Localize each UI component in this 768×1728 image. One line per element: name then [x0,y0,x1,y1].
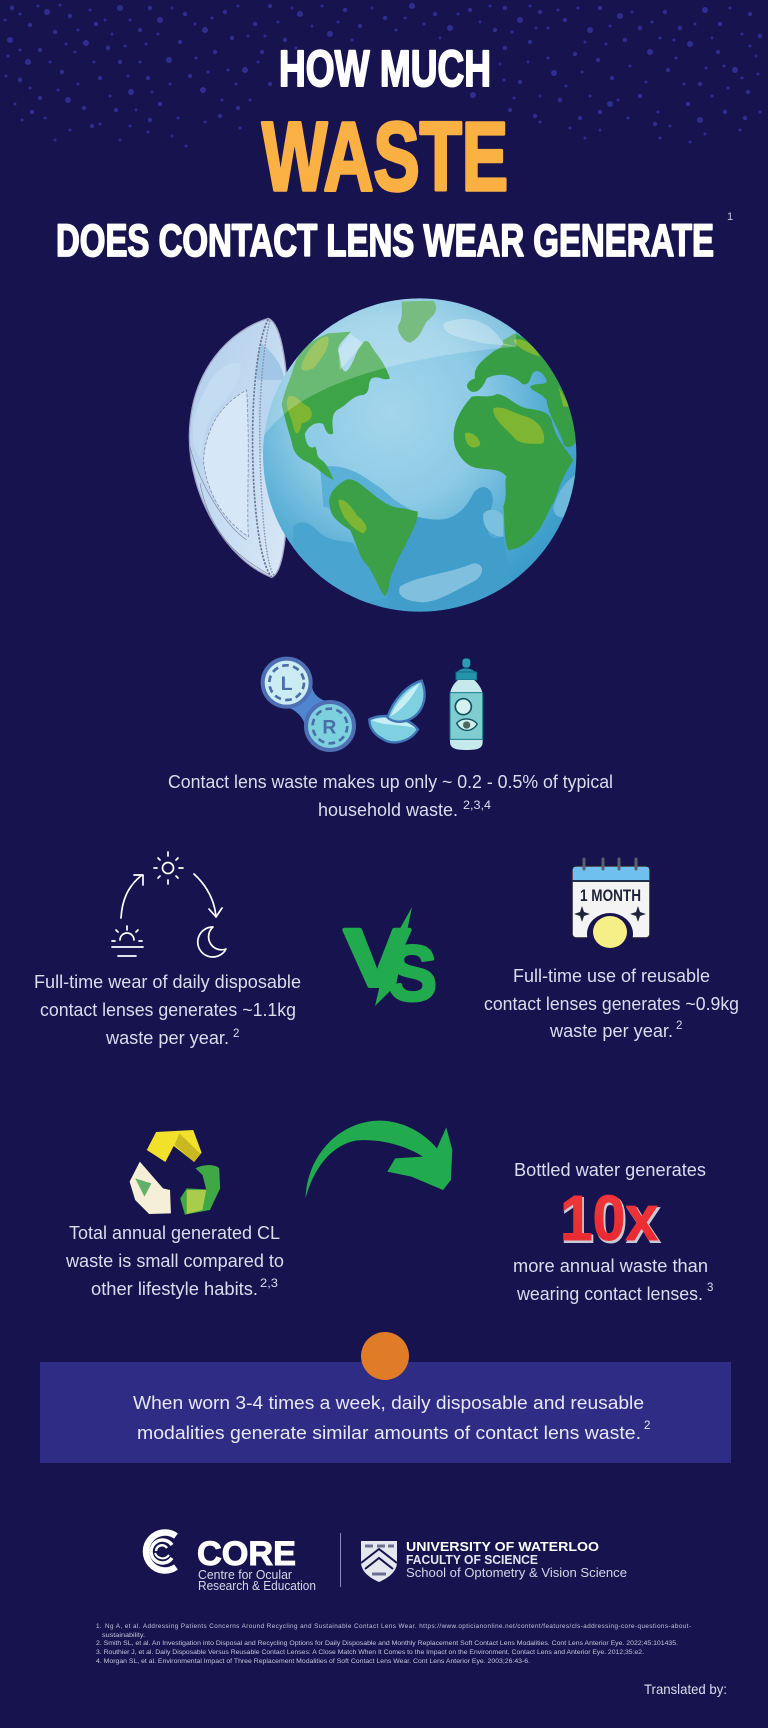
callout: wear frequency: modalities generate similar amounts of contact lens waste. [137,1423,641,1443]
references: Ng A, et al. Addressing Patients Concerns Around Recycling and Sustainable Contact Lens Wear. https://www.opticianonline.net/content/features/cls-addressing-core-questions-about- [105,1623,691,1630]
text: lifestyle habits [65,1223,284,1299]
icon: monthly calendar: 1 MONTH [580,886,641,905]
text: household waste share [168,772,613,820]
references: sustainability. [102,1632,145,1639]
logo: university of waterloo: FACULTY OF SCIENCE [406,1553,538,1567]
arrow: curved green [306,1121,452,1198]
big number: 10x: 10x [561,1184,660,1256]
text: lifestyle habits: 2,3 [260,1278,278,1290]
icon: globe [263,293,580,613]
callout: wear frequency [40,1332,731,1463]
icon: core rings [146,1532,176,1570]
terrain highlights [287,337,570,533]
text: household waste share: Contact lens waste makes up only ~ 0.2 - 0.5% of typical [168,772,613,792]
big number: 10x: 10x [560,1182,658,1254]
logo: core [146,1532,316,1593]
panel: bottled water: wearing contact lenses. [516,1284,703,1304]
panel: daily disposable [34,852,301,1048]
icon: day cycle [112,852,226,957]
logo: university of waterloo [361,1539,627,1582]
references [96,1623,691,1665]
title [56,40,733,266]
icon: lens case: L [281,674,293,695]
logo: university of waterloo: School of Optometry & Vision Science [406,1565,627,1580]
continent: greenland [398,301,436,343]
panel: bottled water: 3 [707,1282,713,1294]
icon: versus badge: S [388,929,437,1017]
continent: africa [454,394,573,550]
references: 4. Morgan SL, et al. Environmental Impact of Three Replacement Modalities of Soft Contact Lens Wear. Cont Lens Anterior Eye. 2003;26:43-6. [96,1658,530,1665]
icon: lens case: R [322,717,336,738]
text: daily disposable waste: waste per year. [105,1028,229,1048]
icon: shield [361,1541,397,1582]
text: daily disposable waste: contact lenses generates ~1.1kg [40,1000,296,1020]
continent: eurasia [467,333,576,447]
callout: wear frequency: When worn 3-4 times a week, daily disposable and reusable [133,1393,644,1413]
illustration: contact lens and globe [189,293,580,613]
text: reusable waste: contact lenses generates ~0.9kg [484,994,739,1014]
text: daily disposable waste [34,972,301,1048]
text: lifestyle habits: Total annual generated CL [69,1223,280,1243]
speckled dots at top [5,5,760,146]
panel: lifestyle comparison [65,1130,284,1299]
icon: lens case [263,659,354,750]
panel: reusable [484,859,739,1041]
text: reusable waste [484,966,739,1041]
text: daily disposable waste: Full-time wear of daily disposable [34,972,301,992]
panel: bottled water: more annual waste than [513,1256,708,1276]
icon: versus badge [344,907,437,1017]
text: household waste share: 2,3,4 [463,800,492,812]
callout: wear frequency: 2 [644,1420,650,1432]
logo: university of waterloo: UNIVERSITY OF WATERLOO [406,1539,599,1554]
logo: core: Centre for Ocular [198,1568,292,1582]
icon: recycling symbol [130,1130,220,1215]
text: reusable waste: Full-time use of reusable [513,966,710,986]
panel: bottled water [513,1160,713,1304]
title reference superscript: 1 [727,211,733,223]
translation credit: Translated by: [644,1681,727,1697]
text: reusable waste: 2 [676,1020,682,1032]
text: reusable waste: waste per year. [549,1021,673,1041]
references: 3. Routhier J, et al. Daily Disposable Versus Reusable Contact Lenses: A Close Match When It Comes to the Impact on the Environment. Contact Lens and Anterior Eye. 2012;35:e2. [96,1649,644,1656]
title line: how much: HOW MUCH [279,40,491,97]
references: 1. [96,1623,102,1630]
glossy highlight [263,293,517,437]
text: lifestyle habits: waste is small compared to [65,1251,284,1271]
continent: north america [282,332,390,480]
text: daily disposable waste: 2 [233,1028,239,1040]
icon: contact lenses [369,681,425,742]
text: household waste share: household waste. [318,800,458,820]
logo: core: Research & Education [198,1579,316,1593]
text: lifestyle habits: other lifestyle habits. [91,1279,258,1299]
icon: orange dot [361,1332,409,1380]
logo: core: CORE [197,1535,296,1573]
icon: monthly calendar [572,859,650,955]
icon: contact lens [189,318,289,577]
icon: solution bottle [450,658,483,750]
continent: south america [329,479,418,596]
panel: bottled water: Bottled water generates [514,1160,706,1180]
icons: lens case, lenses, solution bottle [263,658,483,750]
icon: versus badge: V [344,913,410,1004]
references: 2. Smith SL, et al. An Investigation into Disposal and Recycling Options for Daily Disposable and Monthly Replacement Soft Contact Lens Modalities. Cont Lens Anterior Eye. 2022;45:101435. [96,1640,678,1647]
title line: waste: WASTE [262,102,508,211]
